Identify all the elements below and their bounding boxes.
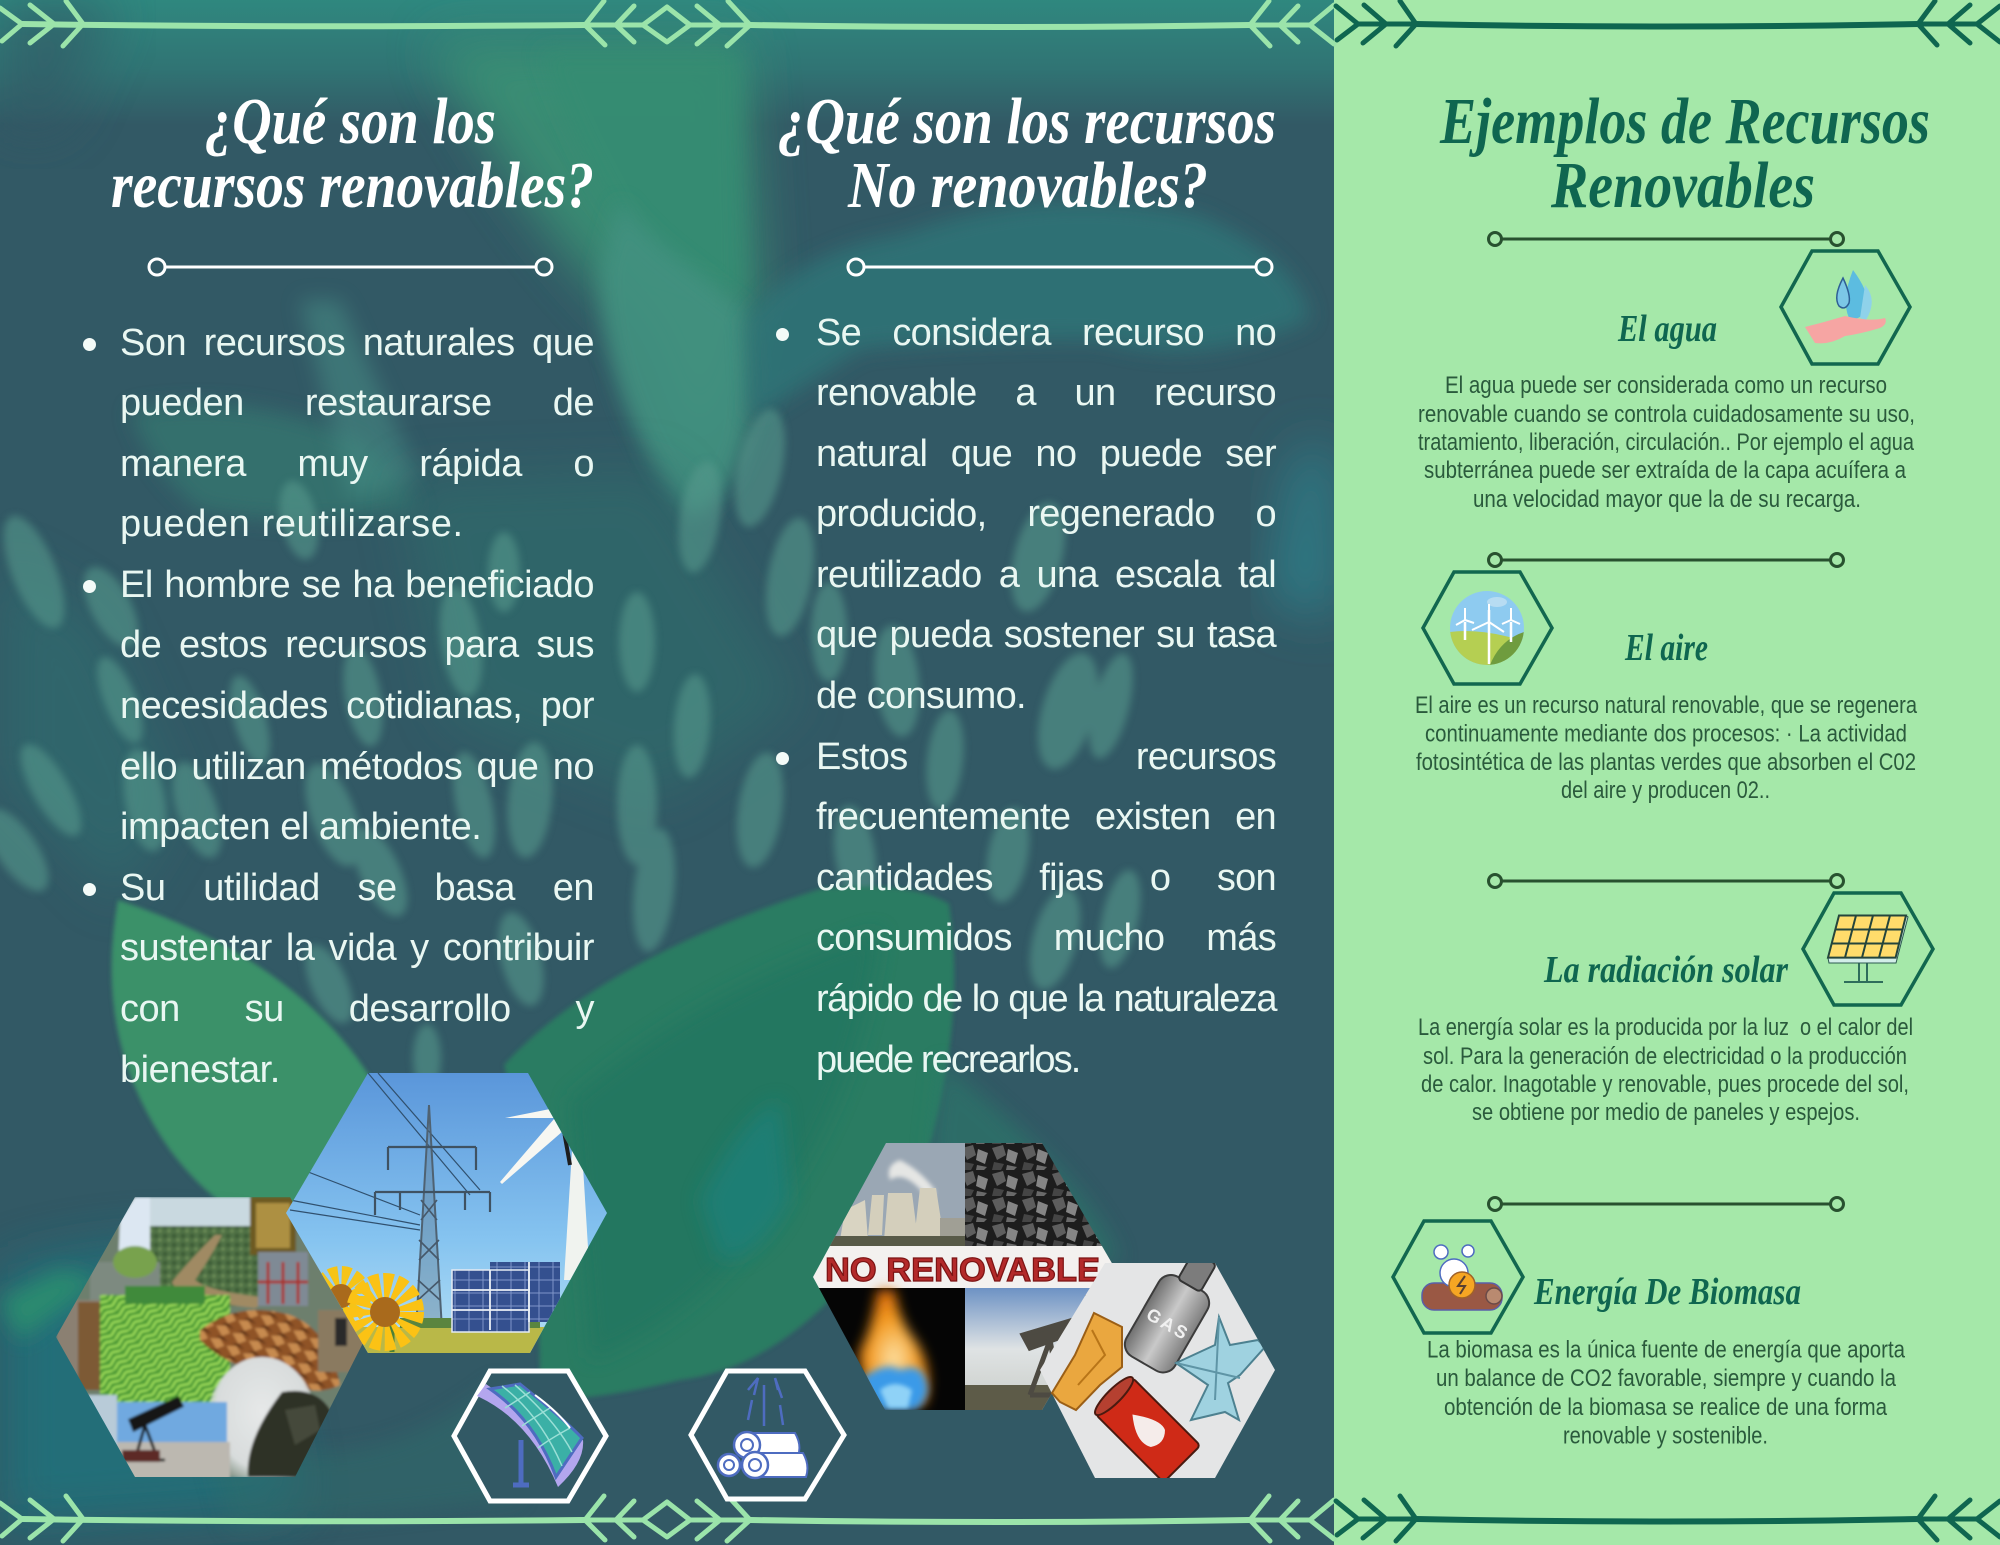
- section: la radiacion solar: sol. Para la generación de electricidad o la producción: [1423, 1043, 1907, 1070]
- bullet text 2: de estos recursos para sus: [120, 624, 594, 666]
- bullet text 3: con su desarrollo y: [120, 988, 594, 1030]
- heading: [778, 85, 1276, 222]
- photo hexagon: gas, oil and minerals: [1040, 1263, 1275, 1478]
- bullet text 1: reutilizado a una escala tal: [816, 554, 1276, 596]
- panel: que son los recursos renovables: [56, 85, 609, 1504]
- bullet text 3: sustentar la vida y contribuir: [120, 927, 594, 969]
- panel: que son los recursos no renovables: [688, 85, 1278, 1502]
- section: energia de biomasa: Energía De Biomasa: [1533, 1271, 1801, 1313]
- section: el agua: una velocidad mayor que la de su recarga.: [1473, 486, 1861, 513]
- heading: [1439, 85, 1930, 222]
- section: la radiacion solar: [1418, 874, 1933, 1126]
- bullet text 1: pueden restaurarse de: [120, 382, 594, 424]
- section: el agua: El agua: [1617, 308, 1717, 350]
- large leaves: [112, 900, 375, 1230]
- bullet text 1: producido, regenerado o: [816, 493, 1276, 535]
- bullet text 1: [816, 302, 1276, 727]
- bullet text 2: necesidades cotidianas, por: [120, 685, 594, 727]
- bullet text 3: [120, 858, 594, 1100]
- section: energia de biomasa: un balance de CO2 favorable, siempre y cuando la: [1436, 1365, 1897, 1392]
- bullet text 1: de consumo.: [816, 675, 1026, 717]
- section: energia de biomasa: obtención de la biomasa se realice de una forma: [1444, 1394, 1888, 1421]
- section: el aire: El aire es un recurso natural renovable, que se regenera: [1415, 692, 1918, 719]
- section: el agua: tratamiento, liberación, circulación.. Por ejemplo el agua: [1418, 429, 1915, 456]
- bullet text 1: que pueda sostener su tasa: [816, 614, 1276, 656]
- section: energia de biomasa: La biomasa es la única fuente de energía que aporta: [1427, 1336, 1906, 1364]
- bullet text 2: puede recrearlos.: [816, 1039, 1079, 1081]
- bullet text 2: [120, 555, 594, 858]
- buds: [0, 405, 1148, 1092]
- section: el aire: continuamente mediante dos procesos: · La actividad: [1425, 720, 1907, 748]
- divider: [846, 258, 1274, 276]
- icon: wood logs in white hexagon: [691, 1371, 844, 1499]
- section: el aire: El aire: [1624, 627, 1708, 669]
- bullet text 1: [120, 312, 594, 555]
- section: la radiacion solar: de calor. Inagotable y renovable, pues procede del sol,: [1421, 1071, 1909, 1098]
- bullet text 1: Son recursos naturales que: [120, 322, 594, 364]
- bullet text 1: renovable a un recurso: [816, 372, 1276, 414]
- panel: right background: [1334, 0, 2000, 1545]
- photo hexagon: no renovable: [813, 1143, 1123, 1410]
- section: el aire: [1415, 554, 1918, 804]
- bullet text 2: [816, 727, 1276, 1090]
- bullet list: [776, 312, 1278, 1081]
- section: la radiacion solar: La radiación solar: [1543, 949, 1789, 991]
- photo hexagon: gas, oil and minerals: GAS: [1143, 1304, 1191, 1343]
- bullet text 2: frecuentemente existen en: [816, 796, 1276, 838]
- heading: Renovables: [1550, 149, 1815, 222]
- bullet text 3: Su utilidad se basa en: [120, 867, 594, 909]
- bullet text 2: El hombre se ha beneficiado: [120, 564, 594, 606]
- icon: solar panel in white hexagon: [454, 1371, 606, 1501]
- section: energia de biomasa: [1393, 1198, 1906, 1450]
- heading: [111, 85, 594, 222]
- bullet text 1: natural que no puede ser: [816, 433, 1276, 475]
- photo collage: no renovable hexagons: [688, 1143, 1275, 1502]
- photo collage: renovable hexagons: [56, 1073, 609, 1504]
- panel: ejemplos de recursos renovables: [1391, 85, 1935, 1450]
- divider: [148, 258, 554, 276]
- section: energia de biomasa: renovable y sostenible.: [1563, 1422, 1768, 1450]
- section: el agua: renovable cuando se controla cuidadosamente su uso,: [1418, 401, 1915, 428]
- section: el agua: [1418, 232, 1915, 513]
- heading: ¿Qué son los: [205, 85, 496, 158]
- bullet text 2: consumidos mucho más: [816, 917, 1276, 959]
- bullet text 2: Estos recursos: [816, 736, 1276, 778]
- photo hexagon: energy landscape: [286, 1073, 607, 1355]
- bullet text 2: rápido de lo que la naturaleza: [816, 978, 1276, 1020]
- section: el aire: fotosintética de las plantas verdes que absorben el C02: [1416, 749, 1916, 776]
- heading: No renovables?: [847, 149, 1208, 222]
- section: el aire: del aire y producen 02..: [1561, 777, 1770, 804]
- bullet text 3: bienestar.: [120, 1049, 280, 1091]
- bullet text 1: pueden reutilizarse.: [120, 503, 464, 545]
- section: la radiacion solar: se obtiene por medio de paneles y espejos.: [1472, 1099, 1860, 1126]
- bullet text 2: ello utilizan métodos que no: [120, 746, 594, 788]
- bullet list: [83, 322, 594, 1091]
- section: el agua: El agua puede ser considerada como un recurso: [1445, 372, 1887, 399]
- bullet text 1: Se considera recurso no: [816, 312, 1276, 354]
- bullet text 2: impacten el ambiente.: [120, 806, 481, 848]
- bullet text 1: manera muy rápida o: [120, 443, 594, 485]
- section: la radiacion solar: La energía solar es la producida por la luz o el calor del: [1418, 1014, 1913, 1041]
- background: blurred leaf photo: [0, 0, 1334, 1534]
- photo hexagon: no renovable: NO RENOVABLE: [825, 1251, 1100, 1288]
- section: el agua: subterránea puede ser extraída de la capa acuífera a: [1424, 457, 1907, 484]
- bullet text 2: cantidades fijas o son: [816, 857, 1276, 899]
- photo hexagon: natural resources collage: [56, 1197, 368, 1493]
